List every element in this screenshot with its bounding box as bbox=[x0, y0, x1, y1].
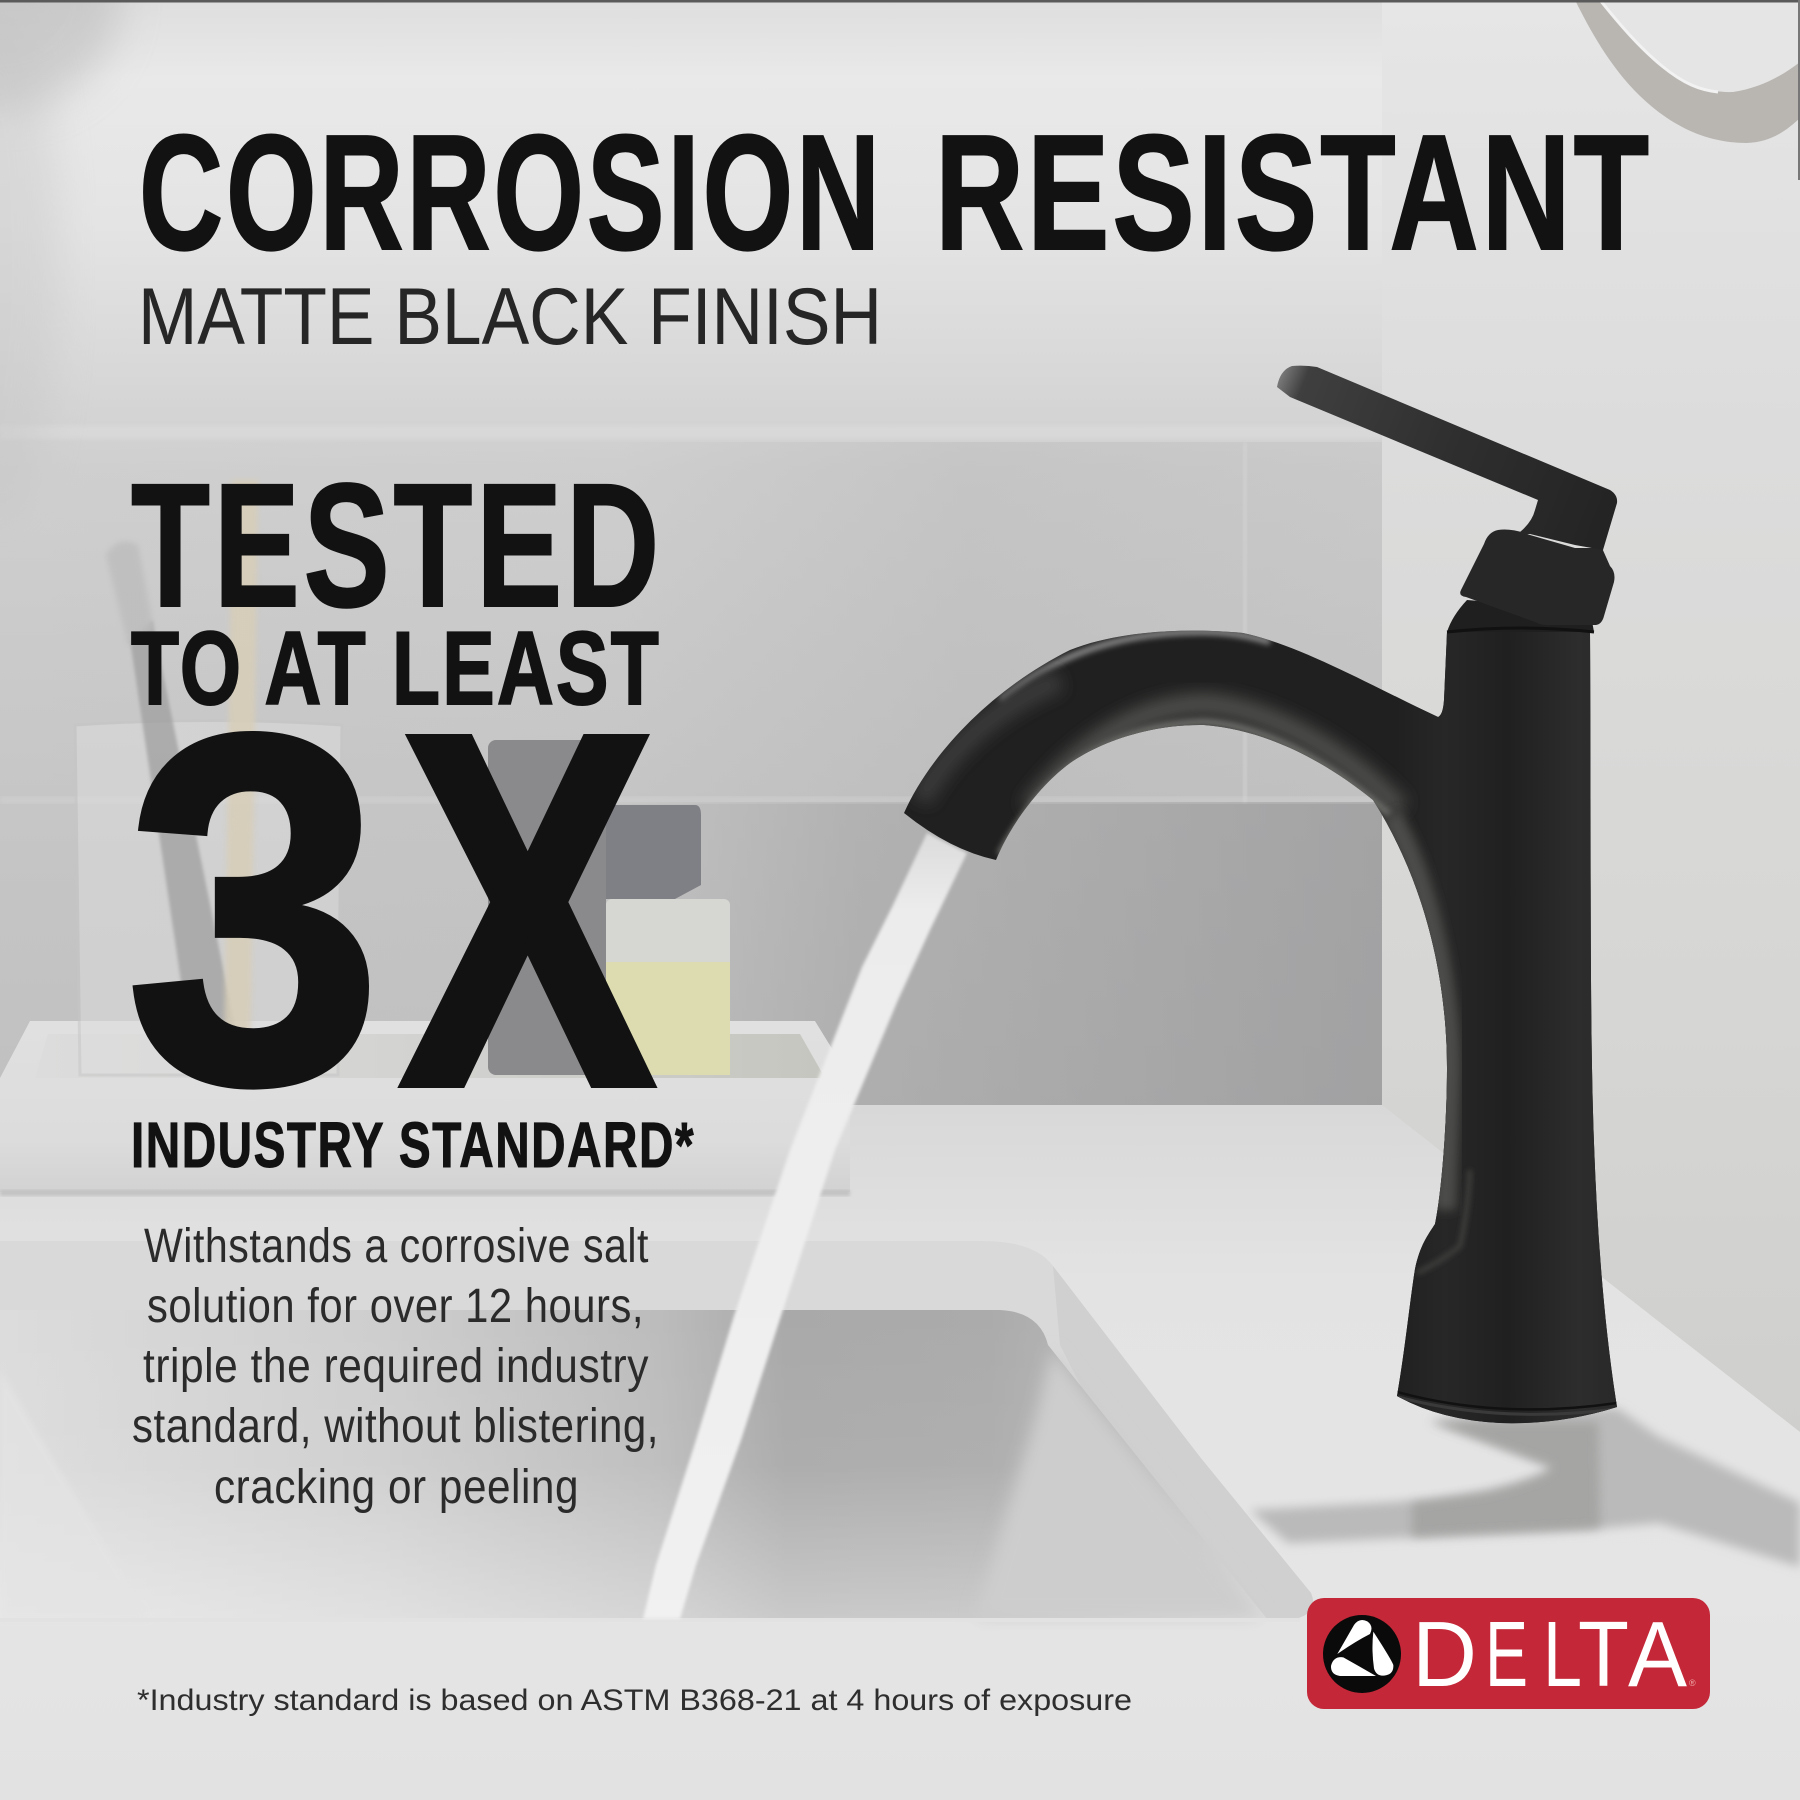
faucet shadow on countertop bbox=[1250, 1408, 1800, 1567]
water stream bbox=[643, 833, 967, 1619]
heading: tested: TESTED bbox=[131, 448, 663, 644]
body text: triple the required industry bbox=[143, 1340, 649, 1393]
big number: 3X: 3 bbox=[125, 632, 383, 1187]
Delta logo bbox=[1307, 1598, 1710, 1709]
heading: to at least: TO AT LEAST bbox=[131, 611, 661, 727]
background: back wall bbox=[0, 0, 1400, 1122]
faucet bbox=[890, 366, 1630, 1440]
page edge lines bbox=[0, 0, 1800, 180]
toiletries tray bbox=[0, 1021, 850, 1196]
wordmark: T bbox=[1578, 1602, 1629, 1706]
faucet collar bbox=[1460, 530, 1614, 625]
faucet neck bbox=[1447, 600, 1594, 632]
sink basin bbox=[0, 1241, 1313, 1622]
background: right wall bbox=[1382, 0, 1800, 1440]
footnote: *Industry standard is based on ASTM B368-21 at 4 hours of exposure bbox=[137, 1684, 1132, 1717]
wordmark: L bbox=[1543, 1602, 1582, 1706]
bottles bbox=[488, 740, 730, 1075]
wordmark: E bbox=[1485, 1602, 1528, 1706]
faucet handle bbox=[1277, 366, 1617, 550]
wordmark: A bbox=[1628, 1602, 1687, 1706]
wordmark: ® bbox=[1689, 1678, 1696, 1688]
big number: 3X: X bbox=[401, 630, 656, 1189]
faucet body top rim bbox=[1447, 628, 1594, 632]
title bbox=[139, 101, 1652, 284]
heading: industry standard: INDUSTRY STANDARD* bbox=[131, 1109, 695, 1181]
icon: Delta triangle mark bbox=[1323, 1615, 1401, 1693]
subtitle: MATTE BLACK FINISH bbox=[138, 272, 882, 362]
big number: 3X bbox=[125, 630, 656, 1189]
body text: Withstands a corrosive salt bbox=[144, 1220, 649, 1273]
callout: tested to at least 3X industry standard bbox=[125, 448, 695, 1189]
wordmark bbox=[1412, 1602, 1696, 1706]
title: CORROSION bbox=[139, 101, 883, 284]
round mirror bbox=[1575, 0, 1800, 143]
body text bbox=[132, 1220, 659, 1514]
body text: standard, without blistering, bbox=[132, 1400, 659, 1453]
glass with toothbrushes bbox=[75, 480, 342, 1075]
body text: cracking or peeling bbox=[214, 1461, 579, 1514]
countertop bbox=[0, 1105, 1800, 1800]
body text: solution for over 12 hours, bbox=[147, 1280, 644, 1333]
wordmark: D bbox=[1412, 1602, 1477, 1706]
faucet body and spout bbox=[890, 620, 1630, 1440]
